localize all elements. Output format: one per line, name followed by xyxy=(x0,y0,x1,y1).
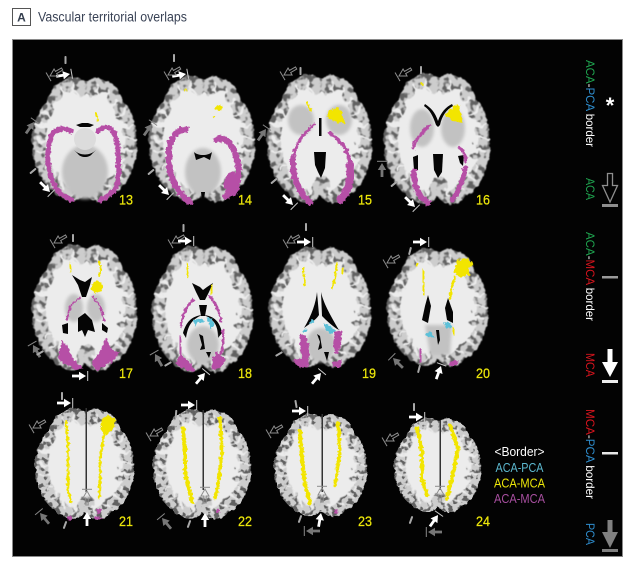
arrows xyxy=(29,392,92,529)
brain slice 14 xyxy=(140,54,256,208)
overlap: yellow xyxy=(305,82,345,123)
panel label A xyxy=(12,8,30,26)
overlap: magenta xyxy=(58,297,120,371)
anatomy xyxy=(275,414,367,516)
overlap: yellow xyxy=(416,258,473,334)
legend: border colours: ACA-MCA xyxy=(494,491,545,506)
key: asterisk symbol: * xyxy=(606,93,615,118)
key: gray arrow xyxy=(602,520,618,552)
brain slice 19 xyxy=(270,223,376,387)
overlap: yellow xyxy=(96,113,98,120)
overlap: magenta xyxy=(413,125,466,203)
key: MCA-PCA border label: MCA - PCA border xyxy=(583,409,597,499)
overlap: yellow xyxy=(66,415,117,502)
slice number: 13 xyxy=(119,192,133,208)
anatomy xyxy=(32,78,138,201)
brain slice 24 xyxy=(382,403,490,537)
key: white tick xyxy=(602,452,618,454)
overlap: magenta xyxy=(48,127,119,200)
arrows xyxy=(140,54,189,200)
slice number: 16 xyxy=(476,192,490,208)
brain slice 22 xyxy=(146,400,252,532)
anatomy xyxy=(153,246,253,372)
arrows xyxy=(266,400,327,536)
overlap: cyan xyxy=(193,318,215,329)
key: hollow arrow xyxy=(602,174,618,207)
overlap: magenta xyxy=(216,509,220,513)
arrows xyxy=(377,65,422,212)
legend: border colours: ACA-MCA xyxy=(494,476,545,490)
anatomy xyxy=(32,245,138,370)
arrows xyxy=(254,64,302,210)
slice number: 20 xyxy=(476,366,490,381)
slice number: 23 xyxy=(358,514,372,529)
anatomy xyxy=(267,75,373,203)
overlap: magenta xyxy=(169,129,240,202)
slice number: 24 xyxy=(476,514,490,529)
overlap: yellow xyxy=(421,83,463,123)
key: ACA-MCA border label: ACA - MCA border xyxy=(583,232,597,321)
title: Vascular territorial overlaps xyxy=(38,10,187,24)
slice number: 17 xyxy=(119,366,133,381)
arrows xyxy=(28,232,88,381)
key: ACA label: ACA xyxy=(583,178,597,200)
brain slice 15 xyxy=(254,64,373,210)
anatomy xyxy=(384,74,491,204)
anatomy xyxy=(154,410,251,519)
overlap: magenta xyxy=(293,124,351,202)
slice number: 14 xyxy=(238,192,252,208)
key: white arrow xyxy=(602,349,618,383)
legend: border colours: ACA-PCA xyxy=(496,460,544,475)
arrows xyxy=(150,224,210,387)
overlap: yellow xyxy=(183,418,222,502)
overlap: yellow xyxy=(417,425,458,498)
anatomy xyxy=(270,247,371,367)
key: ACA-PCA border label: ACA - PCA border xyxy=(583,60,597,147)
overlap: yellow xyxy=(70,262,103,293)
legend: border colours xyxy=(494,444,545,506)
overlap: magenta xyxy=(334,510,338,514)
legend: border colours: <Border> xyxy=(494,444,544,459)
anatomy xyxy=(395,418,481,512)
arrows xyxy=(275,223,326,387)
overlap: magenta xyxy=(176,297,226,372)
panel label A: A xyxy=(17,10,26,24)
arrows xyxy=(383,237,446,381)
brain slice 18 xyxy=(150,224,253,387)
arrows xyxy=(22,56,73,197)
brain slice 17 xyxy=(28,232,138,381)
key: MCA label: MCA xyxy=(583,353,597,377)
overlap: cyan xyxy=(303,320,336,334)
arrows xyxy=(146,400,210,532)
slice number: 22 xyxy=(238,514,252,529)
brain slice 13 xyxy=(22,56,138,208)
brain slice 21 xyxy=(29,392,134,529)
brain slice 23 xyxy=(266,400,372,536)
anatomy xyxy=(388,248,488,366)
slice number: 18 xyxy=(238,366,252,381)
key: PCA label: PCA xyxy=(583,523,597,545)
overlap: yellow xyxy=(300,422,340,503)
overlap: magenta xyxy=(292,330,342,368)
arrows xyxy=(382,403,445,537)
overlap: yellow xyxy=(185,89,222,118)
brain slice 20 xyxy=(383,237,490,381)
slice number: 15 xyxy=(358,192,372,208)
anatomy xyxy=(149,76,256,201)
anatomy xyxy=(36,408,134,519)
overlap: magenta xyxy=(68,508,102,520)
key: gray tick xyxy=(602,276,618,278)
overlap: yellow xyxy=(303,263,343,288)
brain slice 16 xyxy=(377,65,491,212)
slice number: 21 xyxy=(119,514,133,529)
overlap: magenta xyxy=(420,337,458,366)
overlap: yellow xyxy=(187,263,217,294)
overlap: cyan xyxy=(425,322,452,338)
slice number: 19 xyxy=(362,366,376,381)
